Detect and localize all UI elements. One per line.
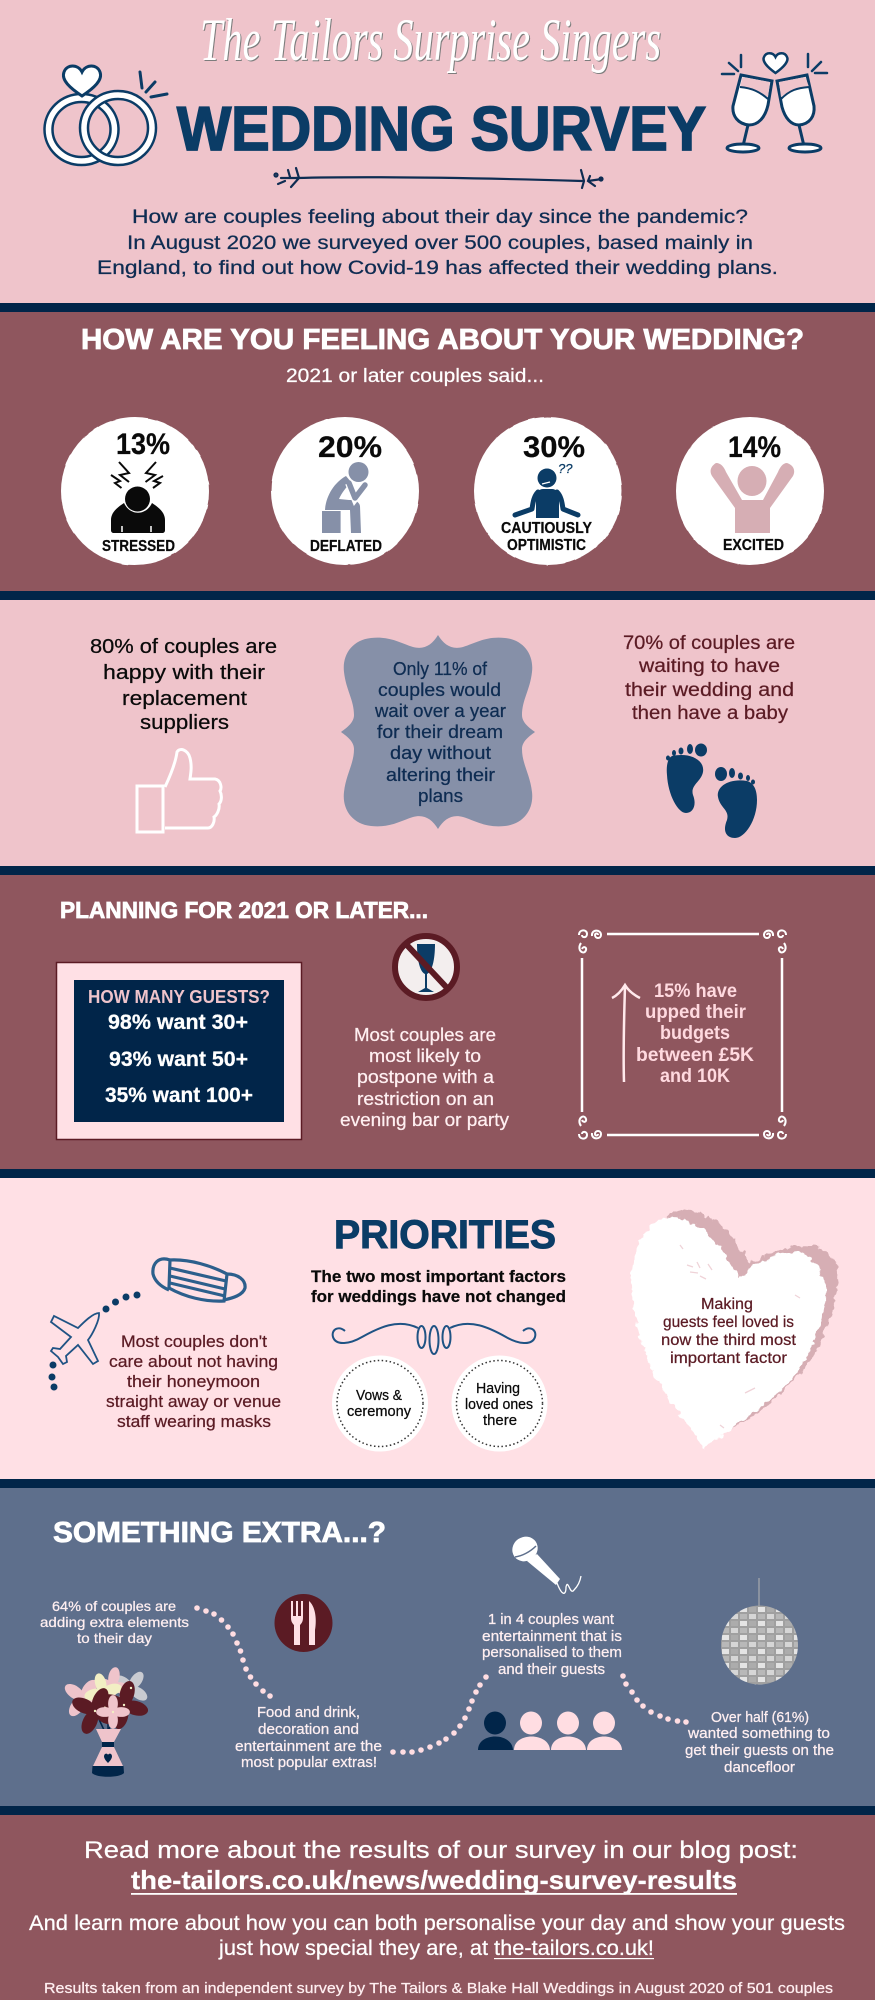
- stat: stressed 13%: 13%: [116, 428, 170, 461]
- text: personalised entertainment: entertainment that is: [482, 1629, 622, 1645]
- text: food drink: entertainment are the: [235, 1739, 382, 1755]
- text: dancefloor: wanted something to: [687, 1726, 830, 1742]
- frame: budget: and 10K: [660, 1066, 730, 1087]
- text: honeymoon and masks: [106, 1332, 281, 1431]
- text: wedding then baby: 70% of couples are: [623, 633, 795, 654]
- frame: budget: between £5K: [636, 1045, 754, 1066]
- badge: vows and ceremony: Vows &: [356, 1387, 402, 1404]
- dotted path: two: [390, 1674, 489, 1755]
- icon: disco ball: [721, 1578, 798, 1684]
- text: personalised entertainment: 1 in 4 couples want: [488, 1612, 614, 1628]
- subheading: two most important factors: for weddings have not changed: [311, 1287, 566, 1306]
- callout: only 11%: altering their: [386, 765, 495, 785]
- panel: suppliers and waiting: [0, 591, 875, 866]
- arrow: budget up: [612, 985, 640, 1082]
- icon: face mask: [153, 1259, 245, 1301]
- panel: footer: [0, 1806, 875, 2000]
- frame: budget: [579, 930, 786, 1139]
- text: dancefloor: [685, 1710, 834, 1776]
- icon: flowers in vase: [53, 1661, 158, 1777]
- callout: only 11%: couples would: [378, 680, 501, 700]
- text: 64% extra elements: to their day: [77, 1630, 152, 1646]
- text: learn more: [29, 1912, 845, 1960]
- divider: twig line: [274, 168, 602, 188]
- subheading: 2021 or later couples said...: [286, 366, 544, 387]
- heading: something extra: SOMETHING EXTRA...?: [53, 1517, 386, 1549]
- text: replacement suppliers: 80% of couples are: [90, 636, 277, 658]
- stat: deflated 20%: DEFLATED: [310, 538, 382, 555]
- text: replacement suppliers: happy with their: [103, 662, 265, 684]
- text: wedding then baby: [623, 633, 795, 724]
- callout: only 11%: Only 11% of: [393, 659, 488, 679]
- text: honeymoon and masks: Most couples don't: [121, 1332, 267, 1351]
- subheading: two most important factors: [311, 1267, 566, 1306]
- dotted path: three: [620, 1673, 689, 1725]
- text: personalised entertainment: [482, 1612, 622, 1678]
- text: honeymoon and masks: staff wearing masks: [117, 1412, 271, 1431]
- text: dancefloor: Over half (61%): [711, 1710, 809, 1726]
- text: postpone restriction: Most couples are: [354, 1025, 496, 1045]
- text: personalised entertainment: and their guests: [498, 1662, 605, 1678]
- icon: people: [478, 1712, 622, 1750]
- text: 64% extra elements: [40, 1598, 189, 1646]
- text: learn more: And learn more about how you can both personalise your day and show your guests: [29, 1912, 845, 1935]
- text: postpone restriction: restriction on an: [357, 1089, 494, 1109]
- stat: stressed 13%: [61, 417, 209, 565]
- stat: excited 14%: 14%: [728, 431, 781, 464]
- stat: excited 14%: EXCITED: [723, 537, 784, 554]
- text: learn more: just how special they are, at the-tailors.co.uk!: [218, 1937, 654, 1960]
- icon: no drinks: [395, 936, 457, 998]
- text: postpone restriction: postpone with a: [357, 1067, 495, 1087]
- intro paragraph: In August 2020 we surveyed over 500 couples, based mainly in: [127, 233, 753, 254]
- heading: planning: PLANNING FOR 2021 OR LATER...: [60, 897, 428, 923]
- callout: only 11%: plans: [418, 786, 463, 806]
- text: wedding then baby: then have a baby: [632, 703, 789, 724]
- intro paragraph: How are couples feeling about their day since the pandemic?: [132, 207, 748, 228]
- badge: having loved ones there: there: [483, 1412, 517, 1429]
- link: blog post: the-tailors.co.uk/news/wedding-survey-results: [131, 1865, 737, 1895]
- dotted path: one: [194, 1605, 273, 1699]
- text: read more: Read more about the results of our survey in our blog post:: [84, 1837, 798, 1864]
- intro paragraph: [97, 207, 778, 279]
- frame: budget: budgets: [660, 1023, 730, 1044]
- card: how many guests: [56, 962, 302, 1140]
- card: how many guests: 98% want 30+: [108, 1011, 248, 1034]
- card: how many guests: 35% want 100+: [105, 1084, 253, 1107]
- card: how many guests: HOW MANY GUESTS?: [88, 987, 270, 1007]
- text: honeymoon and masks: care about not having: [109, 1352, 278, 1371]
- frame: budget: upped their: [645, 1002, 747, 1023]
- stat: excited 14%: [676, 417, 824, 565]
- text: dancefloor: dancefloor: [724, 1760, 795, 1776]
- callout: chalk heart: [632, 1208, 838, 1448]
- text: replacement suppliers: suppliers: [140, 712, 229, 734]
- text: food drink: most popular extras!: [241, 1755, 377, 1771]
- stat: deflated 20%: [271, 417, 419, 565]
- icon: champagne glasses: [722, 53, 827, 152]
- icon: baby footprints: [666, 744, 757, 838]
- icon: microphone: [507, 1532, 581, 1593]
- badge: having loved ones there: [452, 1356, 548, 1452]
- badge: having loved ones there: loved ones: [465, 1396, 533, 1413]
- subheading: two most important factors: The two most important factors: [311, 1267, 566, 1286]
- text: honeymoon and masks: straight away or venue: [106, 1392, 281, 1411]
- heading: wedding survey: WEDDING SURVEY: [177, 95, 706, 164]
- text: 64% extra elements: adding extra elements: [40, 1614, 189, 1630]
- heading: priorities: PRIORITIES: [334, 1213, 556, 1257]
- text: postpone restriction: [340, 1025, 509, 1130]
- callout: chalk heart: now the third most: [661, 1332, 797, 1349]
- stat: cautiously optimistic 30%: [474, 417, 622, 565]
- text: postpone restriction: evening bar or party: [340, 1110, 509, 1130]
- text: dancefloor: get their guests on the: [685, 1743, 834, 1759]
- stat: cautiously optimistic 30%: CAUTIOUSLY: [501, 520, 592, 537]
- stat: cautiously optimistic 30%: ??: [558, 461, 573, 476]
- badge: vows and ceremony: [332, 1356, 428, 1452]
- text: replacement suppliers: [90, 636, 277, 734]
- badge: vows and ceremony: ceremony: [347, 1403, 411, 1420]
- frame: budget: 15% have: [654, 981, 737, 1002]
- text: personalised entertainment: personalised to them: [482, 1645, 622, 1661]
- callout: chalk heart: Making: [701, 1296, 753, 1313]
- panel: planning for 2021 or later: [0, 866, 875, 1169]
- panel: header: [0, 0, 875, 303]
- text: food drink: decoration and: [258, 1722, 359, 1738]
- text: honeymoon and masks: their honeymoon: [127, 1372, 260, 1391]
- icon: wedding rings: [48, 66, 167, 161]
- callout: only 11%: for their dream: [377, 722, 503, 742]
- callout: chalk heart: important factor: [670, 1350, 787, 1367]
- callout: only 11%: day without: [390, 743, 491, 763]
- panel: priorities: [0, 1169, 875, 1479]
- text: wedding then baby: waiting to have: [638, 656, 780, 677]
- callout: chalk heart: guests feel loved is: [663, 1314, 794, 1331]
- text: source: Results taken from an independent survey by The Tailors & Blake Hall Weddings in August 2020 of 501 couples: [44, 1980, 833, 1997]
- stat: deflated 20%: 20%: [318, 431, 382, 464]
- text: food drink: [235, 1705, 382, 1771]
- panel: feelings: [0, 303, 875, 591]
- stat: stressed 13%: STRESSED: [102, 538, 175, 555]
- intro paragraph: England, to find out how Covid-19 has affected their wedding plans.: [97, 258, 778, 279]
- text: postpone restriction: most likely to: [369, 1046, 481, 1066]
- text: replacement suppliers: replacement: [122, 688, 247, 710]
- callout: only 11%: [341, 635, 535, 829]
- icon: aeroplane with dotted trail: [48, 1292, 140, 1390]
- icon: cutlery: [274, 1594, 332, 1652]
- stat: cautiously optimistic 30%: OPTIMISTIC: [507, 537, 586, 554]
- decoration: flourish: [333, 1324, 535, 1354]
- heading: how are you feeling: HOW ARE YOU FEELING ABOUT YOUR WEDDING?: [81, 324, 804, 356]
- panel: something extra: [0, 1479, 875, 1806]
- callout: only 11%: wait over a year: [374, 701, 506, 721]
- text: food drink: Food and drink,: [257, 1705, 360, 1721]
- text: 64% extra elements: 64% of couples are: [52, 1598, 176, 1614]
- badge: having loved ones there: Having: [476, 1380, 520, 1397]
- icon: thumbs up: [137, 750, 221, 832]
- stat: cautiously optimistic 30%: 30%: [523, 431, 585, 464]
- text: wedding then baby: their wedding and: [625, 680, 794, 701]
- title: The Tailors Surprise Singers: The Tailors Surprise Singers: [200, 7, 661, 73]
- card: how many guests: 93% want 50+: [109, 1048, 248, 1071]
